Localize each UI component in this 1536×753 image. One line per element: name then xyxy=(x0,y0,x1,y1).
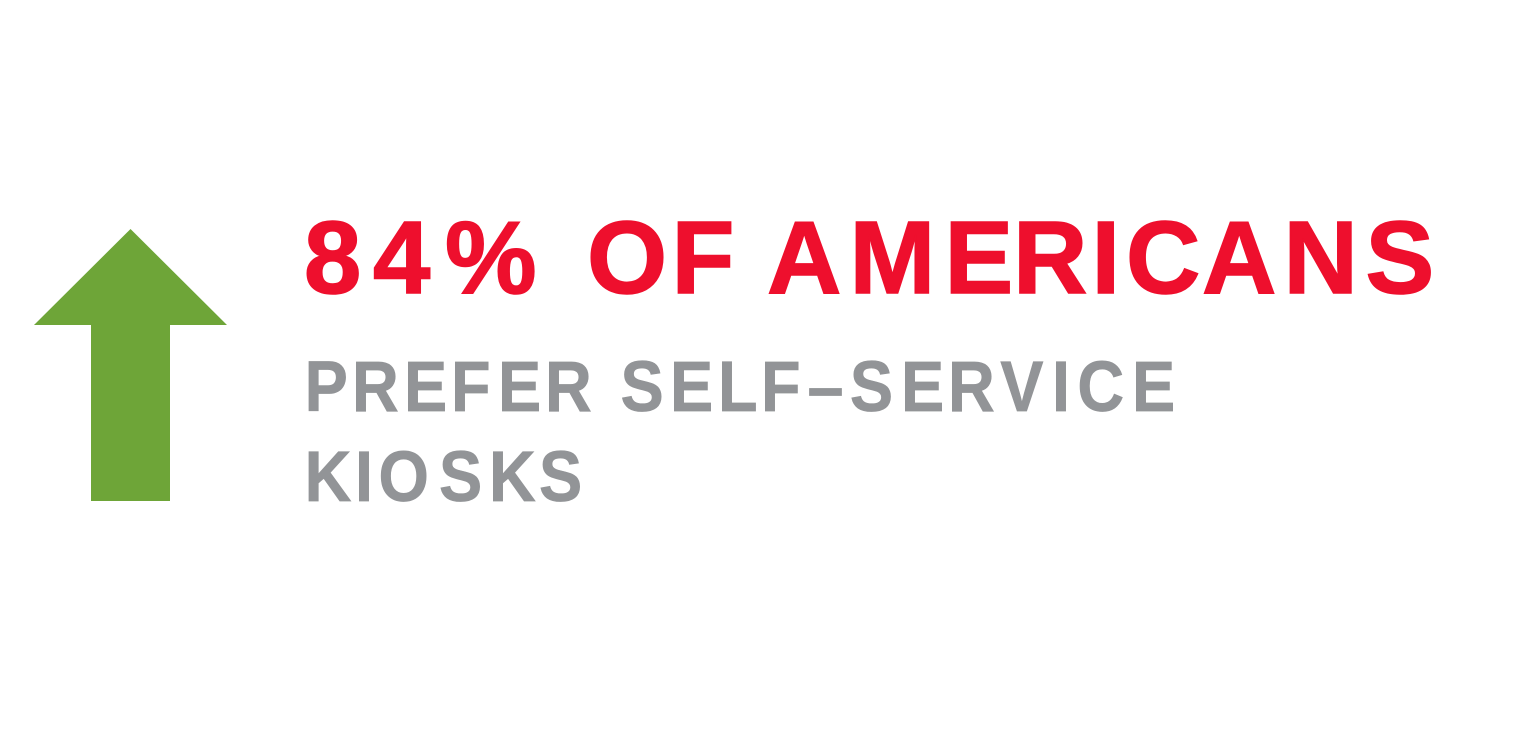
subheading line 2: KIOSKS xyxy=(305,437,582,517)
subheading line 1: PREFER SELF–SERVICE xyxy=(305,347,1175,427)
headline: 84% OF AMERICANS xyxy=(304,200,1434,315)
icon: green up arrow xyxy=(34,229,227,501)
